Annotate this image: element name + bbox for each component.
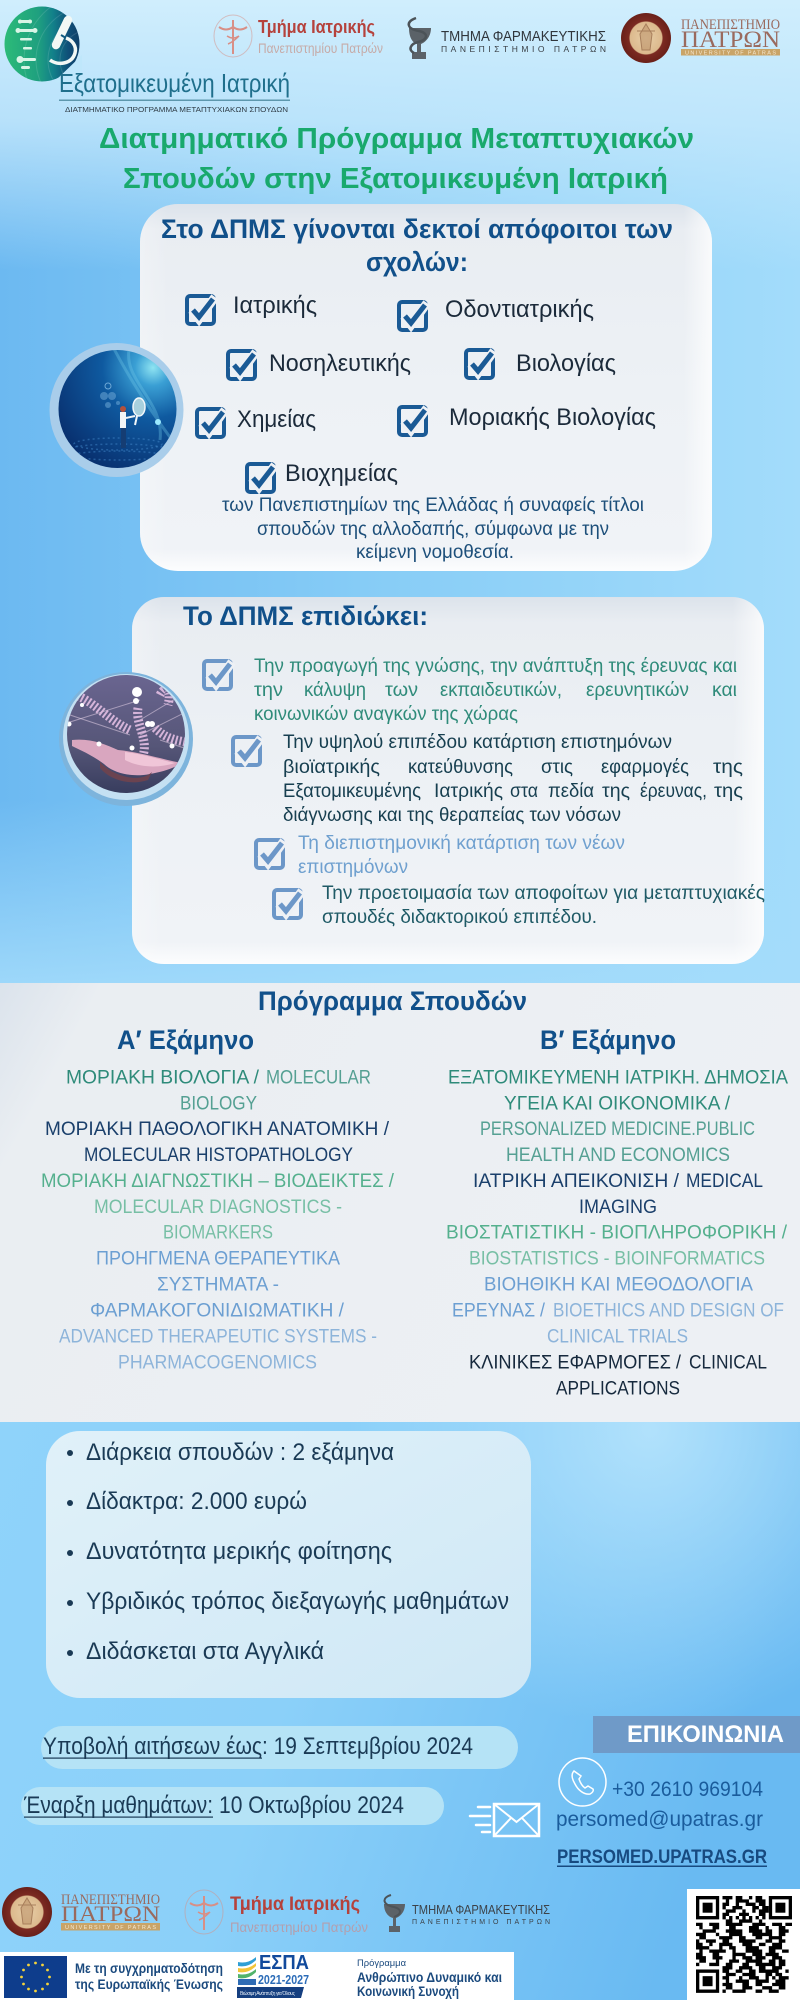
aim 2: Εξατομικευμένης bbox=[283, 780, 421, 802]
aim 2: της bbox=[713, 756, 743, 778]
course: advanced therapeutic systems: ΦΑΡΜΑΚΟΓΟΝΙΔΙΩΜΑΤΙΚΗ / bbox=[90, 1300, 345, 1322]
footer logo: Department of Pharmacy bbox=[384, 1895, 550, 1932]
email: persomed@upatras.gr bbox=[556, 1808, 763, 1831]
contact heading bbox=[593, 1716, 800, 1753]
panel heading: Στο ΔΠΜΣ γίνονται δεκτοί απόφοιτοι των bbox=[161, 214, 673, 244]
course: molecular histopathology bbox=[45, 1118, 390, 1166]
aim 2: Την υψηλού επιπέδου κατάρτιση επιστημόνων bbox=[283, 731, 672, 753]
course: personalized medicine: HEALTH AND ECONOMICS bbox=[506, 1144, 730, 1166]
course: bioethics: CLINICAL TRIALS bbox=[547, 1326, 688, 1348]
footer logo: Department of Medicine: Τμήμα Ιατρικής bbox=[230, 1894, 360, 1915]
course: medical imaging: MEDICAL bbox=[686, 1170, 763, 1192]
icon: university seal bbox=[621, 13, 671, 63]
aim 2: Ιατρικής bbox=[434, 780, 503, 802]
course: molecular biology: BIOLOGY bbox=[180, 1092, 257, 1114]
heading: second semester: Β′ Εξάμηνο bbox=[540, 1025, 676, 1055]
callout: application deadline: : 19 Σεπτεμβρίου 2024 bbox=[262, 1733, 473, 1760]
course: molecular histopathology: ΜΟΡΙΑΚΗ ΠΑΘΟΛΟΓΙΚΗ ΑΝΑΤΟΜΙΚΗ / bbox=[45, 1118, 390, 1140]
admission note: των Πανεπιστημίων της Ελλάδας ή συναφείς τίτλοι bbox=[222, 494, 644, 516]
aim 1: των bbox=[385, 679, 418, 701]
programme name bbox=[357, 1958, 502, 1999]
item: Chemistry: Χημείας bbox=[237, 406, 316, 433]
course: clinical applications bbox=[469, 1352, 767, 1399]
course: advanced therapeutic systems: ΠΡΟΗΓΜΕΝΑ ΘΕΡΑΠΕΥΤΙΚΑ bbox=[96, 1248, 340, 1270]
item: Dentistry bbox=[399, 296, 594, 330]
course: molecular biology: MOLECULAR bbox=[266, 1066, 371, 1088]
course: personalized medicine: ΕΞΑΤΟΜΙΚΕΥΜΕΝΗ ΙΑΤΡΙΚΗ. ΔΗΜΟΣΙΑ bbox=[448, 1066, 788, 1088]
course: clinical applications: CLINICAL bbox=[689, 1352, 767, 1374]
fact: duration: Διάρκεια σπουδών : 2 εξάμηνα bbox=[86, 1439, 394, 1466]
logo: Department of Pharmacy: ΤΜΗΜΑ ΦΑΡΜΑΚΕΥΤΙΚΗΣ bbox=[441, 28, 606, 45]
aim 2: πεδία bbox=[548, 780, 594, 802]
aim 3 bbox=[256, 832, 625, 878]
fact: hybrid: Υβριδικός τρόπος διεξαγωγής μαθημάτων bbox=[86, 1588, 509, 1615]
course: advanced therapeutic systems: PHARMACOGENOMICS bbox=[118, 1352, 317, 1374]
logo: University of Patras: ΠΑΤΡΩΝ bbox=[681, 27, 780, 52]
footer logo: Department of Medicine: Πανεπιστημίου Πατρών bbox=[230, 1919, 368, 1935]
logo: ESPA 2021-2027 bbox=[237, 1952, 309, 1998]
programme name: Πρόγραμμα bbox=[357, 1958, 406, 1969]
item: Biology: Βιολογίας bbox=[516, 350, 616, 377]
footer logo: University of Patras: ΠΑΝΕΠΙΣΤΗΜΙΟ bbox=[61, 1892, 160, 1908]
programme name: Ανθρώπινο Δυναμικό και bbox=[357, 1969, 502, 1985]
panel: study programme bbox=[0, 983, 800, 1422]
footer logo: University of Patras: UNIVERSITY OF PATRAS bbox=[65, 1925, 156, 1931]
item: Biochemistry bbox=[247, 460, 398, 492]
footer logo: University of Patras: ΠΑΤΡΩΝ bbox=[61, 1901, 160, 1926]
logo: Department of Medicine: Πανεπιστημίου Πατρών bbox=[258, 41, 383, 56]
footer logo: Department of Pharmacy: ΠΑΝΕΠΙΣΤΗΜΙΟ ΠΑΤΡΩΝ bbox=[412, 1919, 550, 1926]
aim 2: της bbox=[714, 780, 743, 802]
icon: phone bbox=[559, 1758, 606, 1806]
title: Σπουδών στην Εξατομικευμένη Ιατρική bbox=[123, 163, 668, 195]
title: Διατμηματικό Πρόγραμμα Μεταπτυχιακών bbox=[99, 123, 694, 155]
logo: Department of Pharmacy bbox=[409, 18, 606, 59]
aim 4: Την προετοιμασία των αποφοίτων για μεταπτυχιακές bbox=[322, 882, 765, 904]
logo: Department of Medicine: Τμήμα Ιατρικής bbox=[258, 17, 375, 37]
QR code bbox=[687, 1889, 800, 2000]
logo: ESPA 2021-2027: 2021-2027 bbox=[258, 1972, 309, 1987]
callout: application deadline bbox=[41, 1726, 518, 1769]
course: medical imaging: ΙΑΤΡΙΚΗ ΑΠΕΙΚΟΝΙΣΗ / bbox=[473, 1170, 680, 1192]
callout: course start: 10 Οκτωβρίου 2024 bbox=[219, 1792, 404, 1819]
footer logo: University of Patras bbox=[2, 1887, 160, 1937]
heading: first semester: Α′ Εξάμηνο bbox=[117, 1025, 254, 1055]
programme name: Κοινωνική Συνοχή bbox=[357, 1983, 459, 1999]
aim 1: την bbox=[254, 679, 283, 701]
course: personalized medicine bbox=[448, 1066, 788, 1166]
aim 1: ερευνητικών bbox=[586, 679, 689, 701]
panel: key facts bbox=[46, 1431, 531, 1698]
item: Dentistry: Οδοντιατρικής bbox=[445, 296, 594, 323]
course: molecular diagnostics: BIOMARKERS bbox=[163, 1222, 273, 1244]
item: Molecular Biology: Μοριακής Βιολογίας bbox=[449, 404, 656, 431]
aim 3: επιστημόνων bbox=[298, 856, 408, 878]
logo title: Εξατομικευμένη Ιατρική bbox=[59, 68, 290, 98]
course: clinical applications: ΚΛΙΝΙΚΕΣ ΕΦΑΡΜΟΓΕΣ / bbox=[469, 1352, 682, 1374]
aim 2: εφαρμογές bbox=[601, 756, 689, 778]
logo: University of Patras bbox=[621, 13, 780, 63]
logo: ESPA 2021-2027: Βιώσιμη Ανάπτυξη για Όλους bbox=[240, 1990, 296, 1997]
admission note: κείμενη νομοθεσία. bbox=[356, 541, 514, 563]
course: biostatistics bbox=[446, 1222, 788, 1270]
contact block bbox=[470, 1716, 800, 1868]
website: PERSOMED.UPATRAS.GR bbox=[557, 1846, 767, 1868]
item: Nursing: Νοσηλευτικής bbox=[269, 350, 411, 377]
course: molecular histopathology: MOLECULAR HISTOPATHOLOGY bbox=[84, 1144, 353, 1166]
panel: programme aims bbox=[132, 597, 765, 964]
EU co-funding text: Με τη συγχρηματοδότηση bbox=[75, 1961, 223, 1976]
logo: Personalized Medicine bbox=[4, 6, 290, 112]
course: clinical applications: APPLICATIONS bbox=[556, 1377, 680, 1399]
EU co-funding text: της Ευρωπαϊκής Ένωσης bbox=[75, 1977, 223, 1992]
aim 3: Τη διεπιστημονική κατάρτιση των νέων bbox=[298, 832, 625, 854]
aim 1: κοινωνικών αναγκών της χώρας bbox=[254, 703, 518, 725]
aim 2: στα bbox=[510, 780, 538, 802]
item: Molecular Biology bbox=[399, 404, 656, 435]
course: molecular diagnostics bbox=[41, 1170, 395, 1244]
logo: ESPA 2021-2027: ΕΣΠΑ bbox=[259, 1952, 309, 1974]
panel: admitted graduates bbox=[140, 204, 712, 571]
course: personalized medicine: PERSONALIZED MEDICINE.PUBLIC bbox=[480, 1118, 755, 1140]
fact: part-time: Δυνατότητα μερικής φοίτησης bbox=[86, 1538, 392, 1565]
aim 2: βιοϊατρικής bbox=[283, 756, 380, 778]
item: Biology bbox=[466, 350, 616, 378]
icon: bowl of Hygieia bbox=[409, 18, 431, 59]
column: second semester bbox=[446, 1025, 788, 1399]
course: advanced therapeutic systems: ΣΥΣΤΗΜΑΤΑ - bbox=[157, 1274, 279, 1296]
panel heading bbox=[161, 214, 673, 277]
fact: language: Διδάσκεται στα Αγγλικά bbox=[86, 1638, 324, 1665]
course: molecular biology bbox=[66, 1066, 371, 1114]
aim 2: έρευνας, bbox=[640, 780, 707, 802]
callout: course start: Έναρξη μαθημάτων: bbox=[23, 1792, 213, 1819]
icon: envelope bbox=[470, 1804, 539, 1836]
column: first semester bbox=[41, 1025, 395, 1374]
item: Chemistry bbox=[197, 406, 316, 437]
course: bioethics: ΕΡΕΥΝΑΣ / bbox=[452, 1300, 546, 1322]
course: bioethics: ΒΙΟΗΘΙΚΗ ΚΑΙ ΜΕΘΟΔΟΛΟΓΙΑ bbox=[484, 1274, 753, 1296]
admission note bbox=[222, 494, 644, 563]
course: advanced therapeutic systems bbox=[59, 1248, 377, 1374]
aim 2: της bbox=[602, 780, 630, 802]
course: bioethics bbox=[452, 1274, 784, 1348]
logo: University of Patras: UNIVERSITY OF PATRAS bbox=[685, 50, 776, 56]
course: molecular diagnostics: MOLECULAR DIAGNOSTICS - bbox=[94, 1196, 342, 1218]
course: advanced therapeutic systems: ADVANCED THERAPEUTIC SYSTEMS - bbox=[59, 1326, 377, 1348]
image: DNA over hand bbox=[59, 672, 193, 806]
course: medical imaging bbox=[473, 1170, 763, 1218]
logo: University of Patras: ΠΑΝΕΠΙΣΤΗΜΙΟ bbox=[681, 17, 780, 33]
aim 4 bbox=[274, 882, 765, 928]
item: Medicine: Ιατρικής bbox=[233, 292, 317, 319]
heading: study programme: Πρόγραμμα Σπουδών bbox=[258, 986, 527, 1016]
aim 2: κατεύθυνσης bbox=[408, 756, 513, 778]
icon: microscope and DNA emblem bbox=[4, 6, 80, 82]
footer logo: Department of Pharmacy: ΤΜΗΜΑ ΦΑΡΜΑΚΕΥΤΙΚΗΣ bbox=[412, 1903, 550, 1917]
item: Medicine bbox=[187, 292, 317, 324]
contact heading: ΕΠΙΚΟΙΝΩΝΙΑ bbox=[627, 1721, 784, 1748]
logo: Department of Medicine bbox=[214, 15, 383, 57]
item: Biochemistry: Βιοχημείας bbox=[285, 460, 398, 487]
aim 1: και bbox=[712, 679, 737, 701]
fact: tuition: Δίδακτρα: 2.000 ευρώ bbox=[86, 1488, 307, 1515]
course: molecular diagnostics: ΜΟΡΙΑΚΗ ΔΙΑΓΝΩΣΤΙΚΗ – ΒΙΟΔΕΙΚΤΕΣ / bbox=[41, 1170, 395, 1192]
aim 2: διάγνωσης και της θεραπείας των νόσων bbox=[283, 804, 621, 826]
icon: caduceus bbox=[214, 15, 252, 57]
course: biostatistics: BIOSTATISTICS - BIOINFORMATICS bbox=[469, 1248, 765, 1270]
funding banner bbox=[0, 1952, 514, 2000]
aim 1: εκπαιδευτικών, bbox=[440, 679, 562, 701]
callout: course start bbox=[21, 1787, 444, 1825]
panel heading: Το ΔΠΜΣ επιδιώκει: bbox=[183, 601, 428, 631]
aim 2: στις bbox=[541, 756, 573, 778]
aim 1: κάλυψη bbox=[304, 679, 366, 701]
course: medical imaging: IMAGING bbox=[579, 1196, 657, 1218]
panel heading: σχολών: bbox=[366, 247, 468, 277]
course: molecular biology: ΜΟΡΙΑΚΗ ΒΙΟΛΟΓΙΑ / bbox=[66, 1066, 260, 1088]
course: personalized medicine: ΥΓΕΙΑ ΚΑΙ ΟΙΚΟΝΟΜΙΚΑ / bbox=[504, 1092, 731, 1114]
icon: EU flag bbox=[4, 1956, 67, 1998]
EU co-funding text bbox=[75, 1961, 223, 1992]
image: scientist with DNA bbox=[50, 343, 184, 477]
footer logo: Department of Medicine bbox=[185, 1890, 368, 1935]
callout: application deadline: Υποβολή αιτήσεων έως bbox=[43, 1733, 262, 1760]
course: biostatistics: ΒΙΟΣΤΑΤΙΣΤΙΚΗ - ΒΙΟΠΛΗΡΟΦΟΡΙΚΗ / bbox=[446, 1222, 788, 1244]
aim 4: σπουδές διδακτορικού επιπέδου. bbox=[322, 906, 597, 928]
phone number: +30 2610 969104 bbox=[612, 1778, 763, 1801]
aim 1: Την προαγωγή της γνώσης, την ανάπτυξη της έρευνας και bbox=[254, 655, 737, 677]
logo subtitle: ΔΙΑΤΜΗΜΑΤΙΚΟ ΠΡΟΓΡΑΜΜΑ ΜΕΤΑΠΤΥΧΙΑΚΩΝ ΣΠΟΥΔΩΝ bbox=[65, 105, 288, 114]
title bbox=[99, 123, 694, 195]
aim 1 bbox=[204, 655, 737, 725]
admission note: σπουδών της αλλοδαπής, σύμφωνα με την bbox=[257, 518, 609, 540]
logo: Department of Pharmacy: ΠΑΝΕΠΙΣΤΗΜΙΟ ΠΑΤΡΩΝ bbox=[441, 44, 606, 54]
aim 2 bbox=[233, 731, 743, 826]
